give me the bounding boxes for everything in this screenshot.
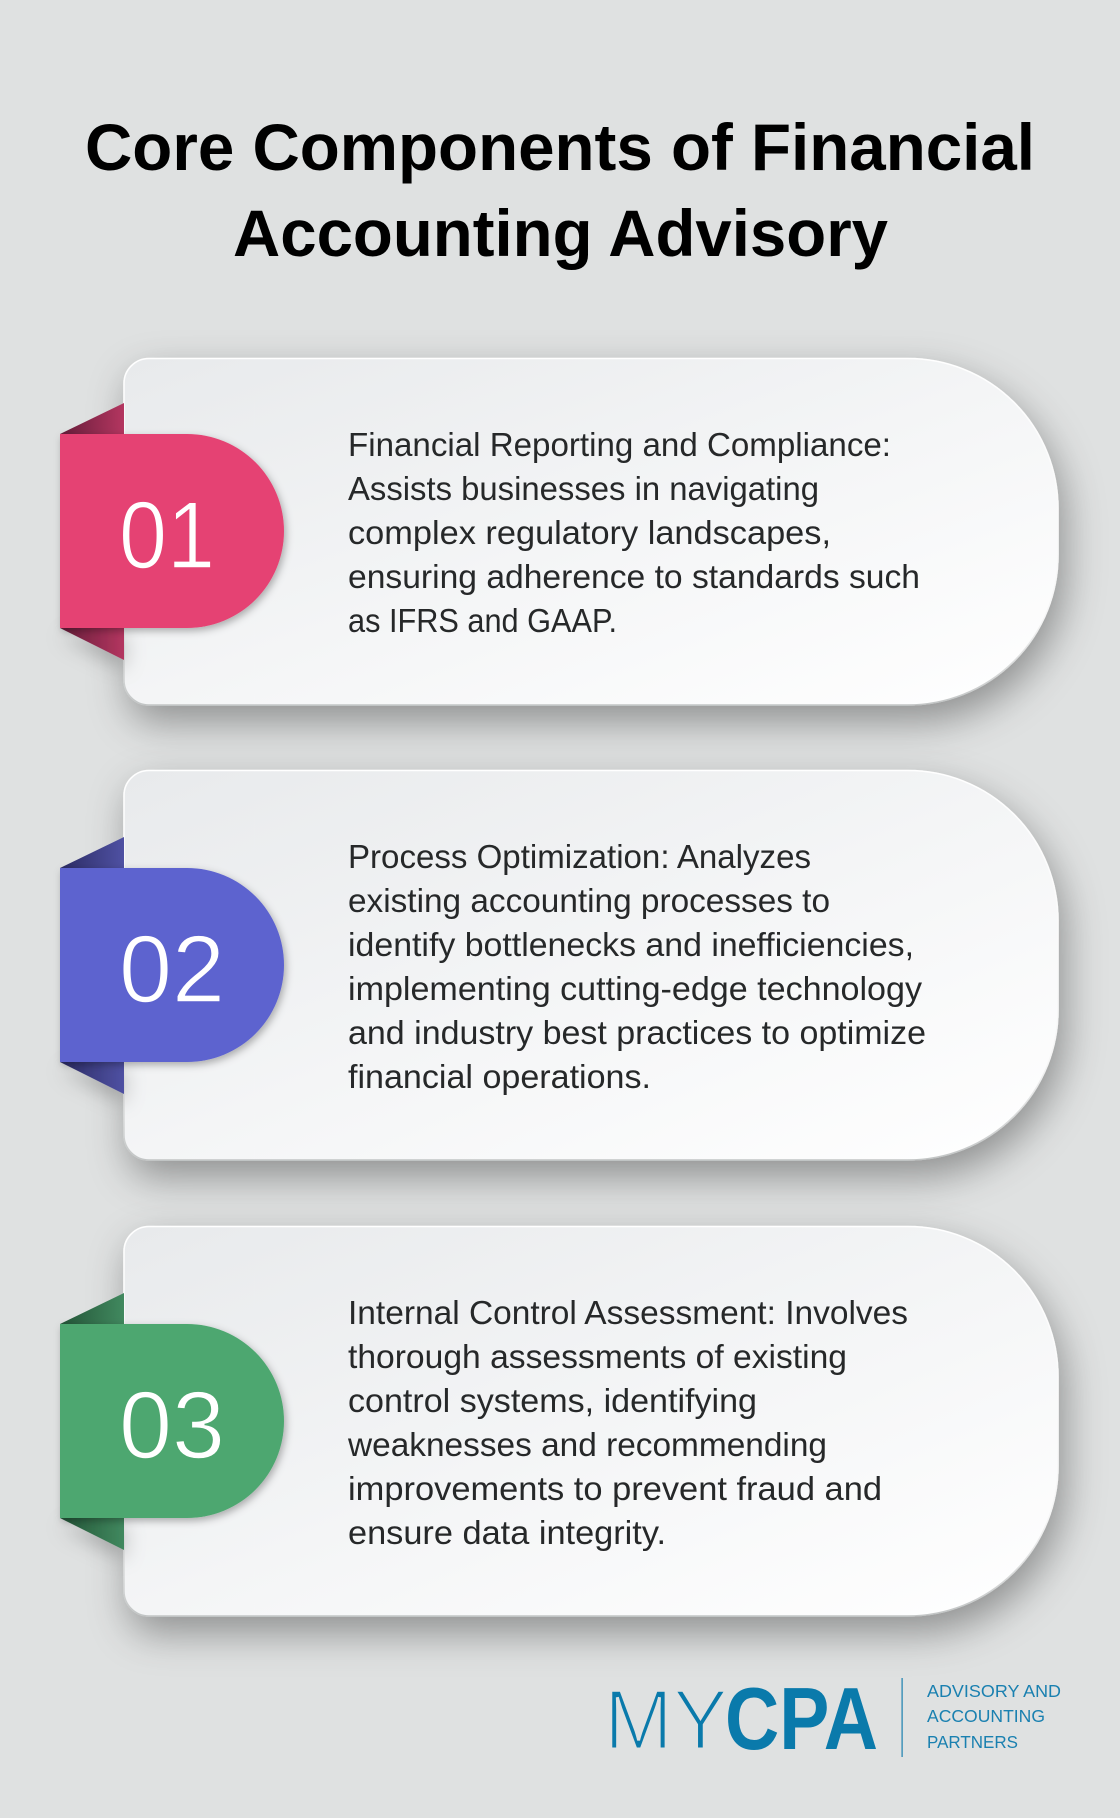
panel: card 1 [60, 358, 1058, 705]
logo divider [902, 1678, 903, 1757]
card 2 text: implementing cutting-edge technology [348, 970, 923, 1007]
card 3 text [347, 1294, 908, 1551]
card 3 text: improvements to prevent fraud and [348, 1470, 882, 1507]
card 3 text: control systems, identifying [348, 1382, 757, 1419]
logo wordmark MY: MY [604, 1673, 728, 1768]
panel: card 3 [60, 1226, 1058, 1616]
card 1 text [348, 426, 920, 639]
card 3 text: ensure data integrity. [348, 1514, 666, 1551]
number 01: 01 [119, 482, 215, 589]
card 2 background [124, 770, 1058, 1160]
logo tagline: ACCOUNTING [927, 1706, 1045, 1726]
panel: card 2 [60, 770, 1058, 1160]
card 2 text: identify bottlenecks and inefficiencies, [348, 926, 914, 963]
number badge 1 [60, 434, 284, 628]
card 1 text: ensuring adherence to standards such [348, 558, 920, 595]
ribbon fold bottom 3 [60, 1518, 124, 1550]
number badge 2 [60, 868, 284, 1062]
ribbon fold top 2 [60, 837, 124, 868]
card 2 text: existing accounting processes to [348, 882, 830, 919]
card 1 text: as IFRS and GAAP. [348, 602, 617, 639]
logo tagline: ADVISORY AND [927, 1681, 1061, 1701]
logo tagline [927, 1681, 1061, 1752]
card 3 background [124, 1226, 1058, 1616]
card 2 text [348, 838, 926, 1095]
number 03: 03 [119, 1372, 225, 1479]
title [85, 110, 1035, 270]
card 3 text: thorough assessments of existing [348, 1338, 847, 1375]
card 1 text: Financial Reporting and Compliance: [348, 426, 891, 463]
logo wordmark CPA: CPA [725, 1669, 878, 1768]
card 2 text: financial operations. [348, 1058, 651, 1095]
card 1 background [124, 358, 1058, 705]
card 2 text: and industry best practices to optimize [348, 1014, 926, 1051]
title: Accounting Advisory [233, 196, 888, 270]
ribbon fold bottom 2 [60, 1062, 124, 1094]
logo tagline: PARTNERS [927, 1732, 1018, 1752]
card 1 text: Assists businesses in navigating [348, 470, 819, 507]
logo: MyCPA [604, 1669, 1061, 1768]
number badge 3 [60, 1324, 284, 1518]
card 3 text: Internal Control Assessment: Involves [348, 1294, 908, 1331]
card 1 text: complex regulatory landscapes, [348, 514, 831, 551]
ribbon fold top 1 [60, 403, 124, 434]
ribbon fold top 3 [60, 1293, 124, 1324]
number 02: 02 [119, 916, 225, 1023]
title: Core Components of Financial [85, 110, 1035, 184]
card 3 text: weaknesses and recommending [347, 1426, 827, 1463]
ribbon fold bottom 1 [60, 628, 124, 660]
card 2 text: Process Optimization: Analyzes [348, 838, 811, 875]
